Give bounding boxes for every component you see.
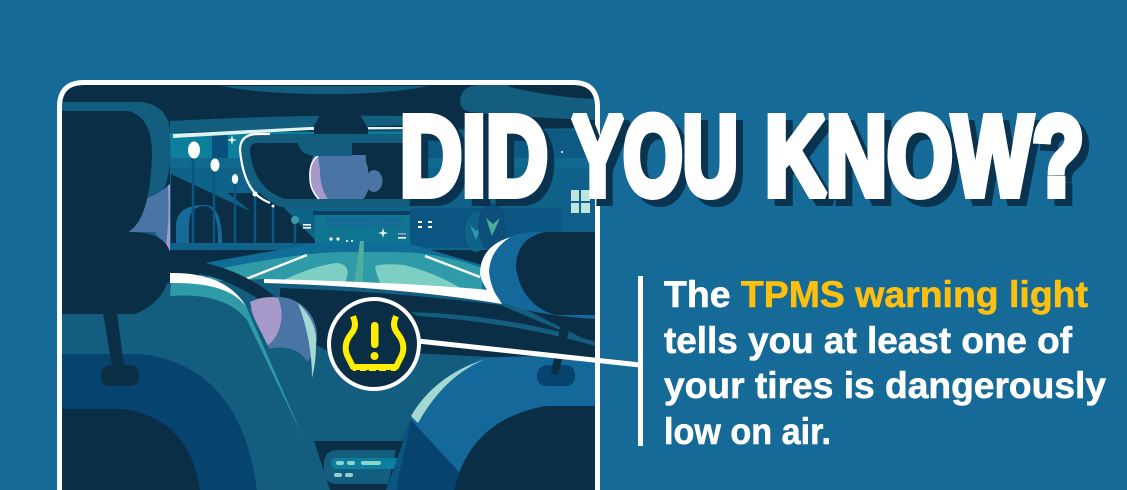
- left seat: [62, 232, 316, 490]
- night scene through windshield: [170, 125, 596, 252]
- steering wheel: [200, 262, 274, 299]
- street lamps: [188, 142, 299, 245]
- connector line from icon to text: [418, 341, 640, 365]
- center console radio: [314, 420, 411, 490]
- right seat: [386, 356, 596, 490]
- stars and signs: [227, 135, 563, 242]
- title: DID YOU KNOW?: YOU: [579, 100, 745, 226]
- hand on wheel: [250, 297, 317, 378]
- text block: TPMS description: your tires is dangerously: [664, 365, 1106, 406]
- dashboard: [138, 279, 595, 490]
- text block: TPMS description: low on air.: [664, 411, 831, 452]
- title: DID YOU KNOW?: DID: [400, 93, 548, 219]
- panel: car interior illustration: [62, 85, 596, 490]
- text block: TPMS description: tells you at least one of: [664, 320, 1073, 361]
- white frame: [60, 82, 598, 490]
- road: [199, 241, 487, 290]
- text block: TPMS description: The TPMS warning light: [664, 274, 1088, 315]
- right headrest with post: [480, 232, 596, 386]
- vertical divider: [638, 276, 643, 446]
- title: DID YOU KNOW?: [400, 93, 1091, 226]
- rear-view mirror: [240, 115, 420, 207]
- text block: TPMS description: [664, 274, 1106, 452]
- icon: TPMS warning light: [329, 299, 419, 389]
- left driver headrest: [62, 102, 170, 254]
- title: DID YOU KNOW?: YOU: [572, 93, 738, 219]
- title: DID YOU KNOW?: DID: [407, 100, 555, 226]
- roof and pillar: [170, 85, 595, 138]
